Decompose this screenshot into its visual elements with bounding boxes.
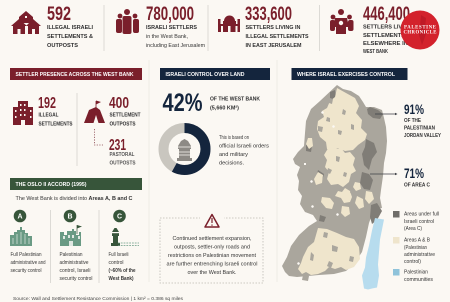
area C: C [117,214,122,220]
icon: warning triangle [205,214,219,227]
stat: 91% [404,101,441,139]
arrow: 91% [375,113,398,115]
logo: Palestine Chronicle: CHRONICLE [404,30,436,36]
stat: 333,600 East Jerusalem: 333,600 [245,4,292,25]
heading: exercises control [292,68,408,80]
area B [60,210,92,282]
stat: 592 settlements [11,4,94,49]
callout: warning: restrictions on Palestinian movement [168,253,257,259]
stat: 446,400 elsewhere: 446,400 [363,4,410,25]
stat: 91%: JORDAN VALLEY [404,133,441,139]
heading: control over land: ISRAELI CONTROL OVER LAND [166,72,245,78]
legend: Palestinian [404,270,428,276]
heading: control over land [160,68,270,80]
panel: settler presence: PASTORAL [110,152,135,158]
stat: 71%: 71% [404,165,424,181]
icon: family [330,9,354,34]
stat: 71% [404,165,430,188]
area A: Full Palestinian [10,252,42,258]
panel: Israeli control over land [160,68,270,283]
heading: Oslo II Accord: THE OSLO II ACCORD (1995) [16,182,87,188]
stat: 592 settlements: 592 [47,4,71,25]
panel: Israeli control over land: OF THE WEST BANK [210,96,260,102]
area A: A [17,214,23,220]
legend: (Palestinian [404,245,427,251]
legend: Israeli control [404,219,434,225]
stat: 592 settlements: SETTLEMENTS & [47,34,93,40]
stat: 91%: OF THE [404,118,421,124]
legend: (Area C) [404,226,422,232]
heading: settler presence: SETTLER PRESENCE ACROSS THE WEST BANK [16,72,134,78]
area C: West Bank) [108,276,134,282]
callout: warning [160,210,263,283]
panel: Oslo II Accord: The West Bank is divided into Areas A, B and C [16,196,133,202]
stat: 333,600 East Jerusalem: IN EAST JERUSALEM [246,43,302,49]
panel: Oslo II Accord [10,178,142,282]
area A: security control [10,268,42,274]
panel: Israeli control over land: official Israeli orders [219,144,270,150]
icon: mosque [218,16,240,32]
stat: 333,600 East Jerusalem [218,4,309,49]
stat: 333,600 East Jerusalem: SETTLERS LIVING IN [246,25,301,31]
area B: B [67,214,73,220]
stat: 71%: OF AREA C [404,182,430,188]
callout: warning: are further entrenching Israeli control [166,262,258,268]
panel: Israeli control over land: (5,660 KM²) [210,106,239,112]
icon: outpost tent [84,100,105,123]
area C: Full Israeli [108,252,128,258]
panel: settler presence: ILLEGAL [38,112,59,118]
area C [108,210,139,282]
icon: building [13,101,33,125]
stat: 780,000 settlers [116,4,205,49]
panel: settler presence: SETTLEMENT [110,112,141,118]
legend: Areas under full [404,212,439,218]
stat: 91%: 91% [404,101,424,117]
stat: 780,000 settlers: including East Jerusalem [146,43,205,49]
source note: Source: Wall and Settlement Resistance Commission | 1 km² = 0.386 sq miles [13,296,184,301]
area A [10,210,46,274]
stat: 592 settlements: OUTPOSTS [47,43,79,49]
stat: 780,000 settlers: in the West Bank, [146,34,188,40]
panel: settler presence [10,68,142,166]
stat: 446,400 elsewhere: SETTLEMENTS [363,33,406,39]
stat: 446,400 elsewhere: ELSEWHERE IN [363,41,408,47]
area B: security control [60,276,92,282]
area A: administrative and [10,260,46,266]
legend: administrative [404,252,435,258]
logo: Palestine Chronicle: PALESTINE [404,26,436,30]
legend: control) [404,259,421,265]
stat: 91%: PALESTINIAN [404,126,435,132]
stat: 333,600 East Jerusalem: ILLEGAL SETTLEMENTS [246,34,309,40]
area B: Palestinian [60,252,83,258]
callout: warning: over the West Bank. [188,270,236,276]
stat: 780,000 settlers: 780,000 [146,4,194,25]
panel: Israeli control over land: 42% [162,89,202,117]
panel: settler presence: OUTPOSTS [110,160,136,166]
legend: Areas A & B [404,238,431,244]
panel: settler presence: SETTLEMENTS [38,122,73,128]
arrow: 71% [370,173,398,175]
area C: control [108,260,124,266]
callout: warning: outposts, settler-only roads and [174,244,250,250]
panel: Israeli control over land: This is based on [219,135,249,141]
icon: houses [11,11,41,34]
stat: 780,000 settlers: ISRAELI SETTLERS [146,25,198,31]
area B: administrative [60,260,89,266]
area B: control, Israeli [60,268,90,274]
area C: (~60% of the [108,268,136,274]
legend [393,211,439,283]
logo: Palestine Chronicle [400,10,440,50]
stat: 446,400 elsewhere: WEST BANK [363,49,388,55]
panel: where Israel exercises control [282,68,441,290]
panel: Israeli control over land: decisions. [219,160,244,166]
stat: 446,400 elsewhere [330,4,419,55]
legend: communities [404,277,434,283]
panel: settler presence: 231 [109,137,126,154]
panel: settler presence: OUTPOSTS [110,122,136,128]
map: West Bank [282,85,387,290]
chart: donut 42% [164,128,206,170]
icon: people [116,9,139,34]
stat: 446,400 elsewhere: SETTLERS LIVING IN [363,24,419,30]
panel: settler presence: 192 [38,95,56,112]
panel: Israeli control over land: and military [219,152,249,158]
heading: exercises control: WHERE ISRAEL EXERCISES CONTROL [297,72,395,78]
panel: settler presence: 400 [109,95,129,112]
stat: 592 settlements: ILLEGAL ISRAELI [47,25,94,31]
callout: warning: Continued settlement expansion, [172,236,252,242]
